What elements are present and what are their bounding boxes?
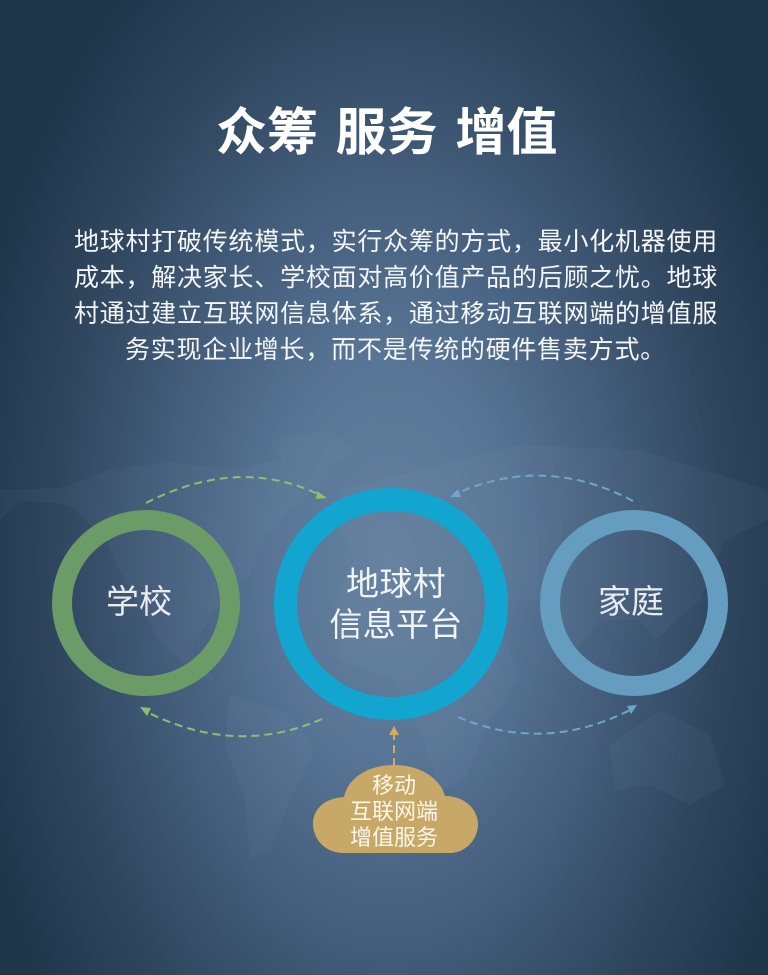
label: cloud: 互联网端 bbox=[350, 799, 438, 824]
label: platform bbox=[329, 565, 463, 643]
ring: school bbox=[62, 520, 230, 686]
intro text block: 务实现企业增长，而不是传统的硬件售卖方式。 bbox=[125, 336, 666, 364]
arrow: school to platform bbox=[146, 477, 327, 503]
label: family: 家庭 bbox=[598, 583, 664, 620]
label: cloud: 移动 bbox=[372, 773, 416, 798]
title: 众筹 服务 增值 bbox=[216, 104, 557, 161]
label: cloud bbox=[350, 773, 438, 850]
label: platform: 信息平台 bbox=[329, 606, 463, 643]
arrow: cloud to platform bbox=[389, 726, 399, 766]
label: platform: 地球村 bbox=[346, 565, 446, 602]
arrow: platform to family bbox=[458, 705, 637, 734]
label: school: 学校 bbox=[106, 583, 172, 620]
intro text block: 成本，解决家长、学校面对高价值产品的后顾之忧。地球 bbox=[74, 264, 718, 292]
arrow: platform to school bbox=[140, 707, 322, 736]
intro text block bbox=[74, 228, 718, 364]
intro text block: 地球村打破传统模式，实行众筹的方式，最小化机器使用 bbox=[74, 228, 718, 256]
ring: platform bbox=[286, 500, 496, 708]
label: cloud: 增值服务 bbox=[350, 825, 438, 850]
icon: cloud bbox=[313, 765, 478, 853]
arrow: family to platform bbox=[450, 476, 633, 501]
intro text block: 村通过建立互联网信息体系，通过移动互联网端的增值服 bbox=[74, 300, 718, 328]
ring: family bbox=[550, 520, 718, 686]
